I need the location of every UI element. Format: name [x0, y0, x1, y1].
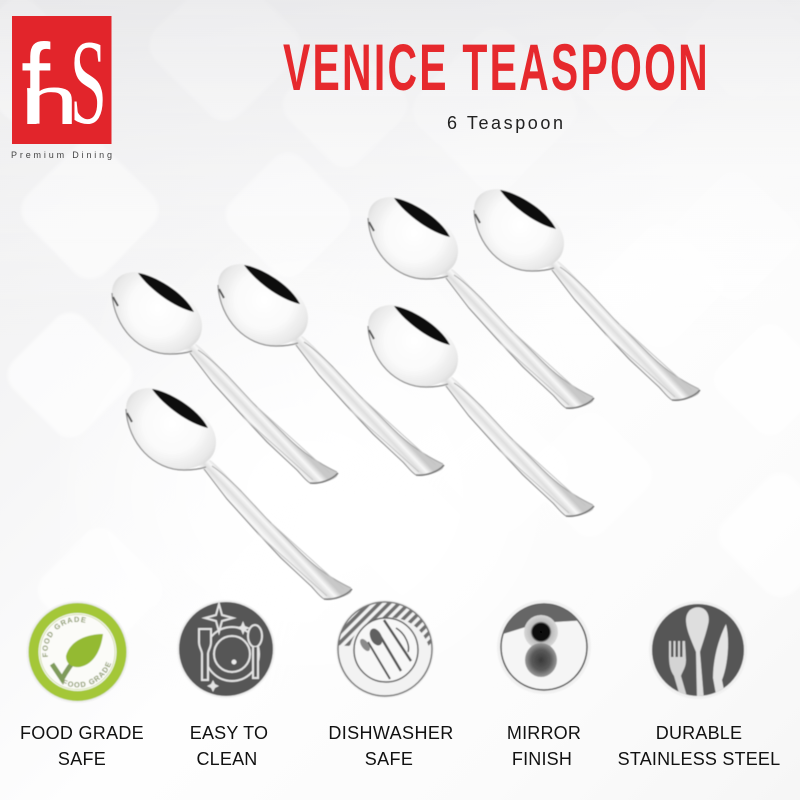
logo letters: S [70, 16, 107, 150]
spoon 3 [126, 388, 352, 599]
subtitle: 6 Teaspoon [447, 113, 563, 133]
label: easy to clean: EASY TO [190, 723, 268, 743]
logo tagline: Premium Dining [11, 150, 112, 160]
label: durable stainless steel: DURABLE [656, 723, 742, 743]
label: dishwasher safe: DISHWASHER [328, 723, 454, 743]
label: dishwasher safe: SAFE [365, 749, 413, 769]
icon: dishwasher safe [336, 600, 434, 698]
label: mirror finish: MIRROR [507, 723, 581, 743]
spoon 1 [112, 272, 338, 483]
logo letters: f [21, 22, 51, 149]
logo red square [12, 16, 112, 144]
spoon 5 [368, 197, 594, 408]
icon: food grade: FOOD GRADE [42, 616, 86, 658]
icon: mirror finish [497, 600, 591, 694]
logo [11, 16, 112, 160]
icon: food grade: FOOD GRADE [62, 662, 112, 688]
label: easy to clean: CLEAN [196, 749, 258, 769]
icon: food grade [27, 601, 128, 702]
logo letters [20, 16, 107, 150]
spoons group [112, 189, 700, 599]
logo letters: n [20, 63, 79, 139]
label: food grade safe: FOOD GRADE [20, 723, 144, 743]
icon: easy to clean [177, 600, 275, 698]
label: durable stainless steel: STAINLESS STEEL [618, 749, 780, 769]
spoon 2 [218, 264, 444, 475]
icon: durable stainless steel [649, 601, 747, 700]
label: food grade safe: SAFE [58, 749, 106, 769]
title: VENICE TEASPOON [283, 30, 708, 104]
spoon 6 [474, 189, 700, 400]
spoon 4 [368, 305, 594, 516]
label: mirror finish: FINISH [512, 749, 572, 769]
